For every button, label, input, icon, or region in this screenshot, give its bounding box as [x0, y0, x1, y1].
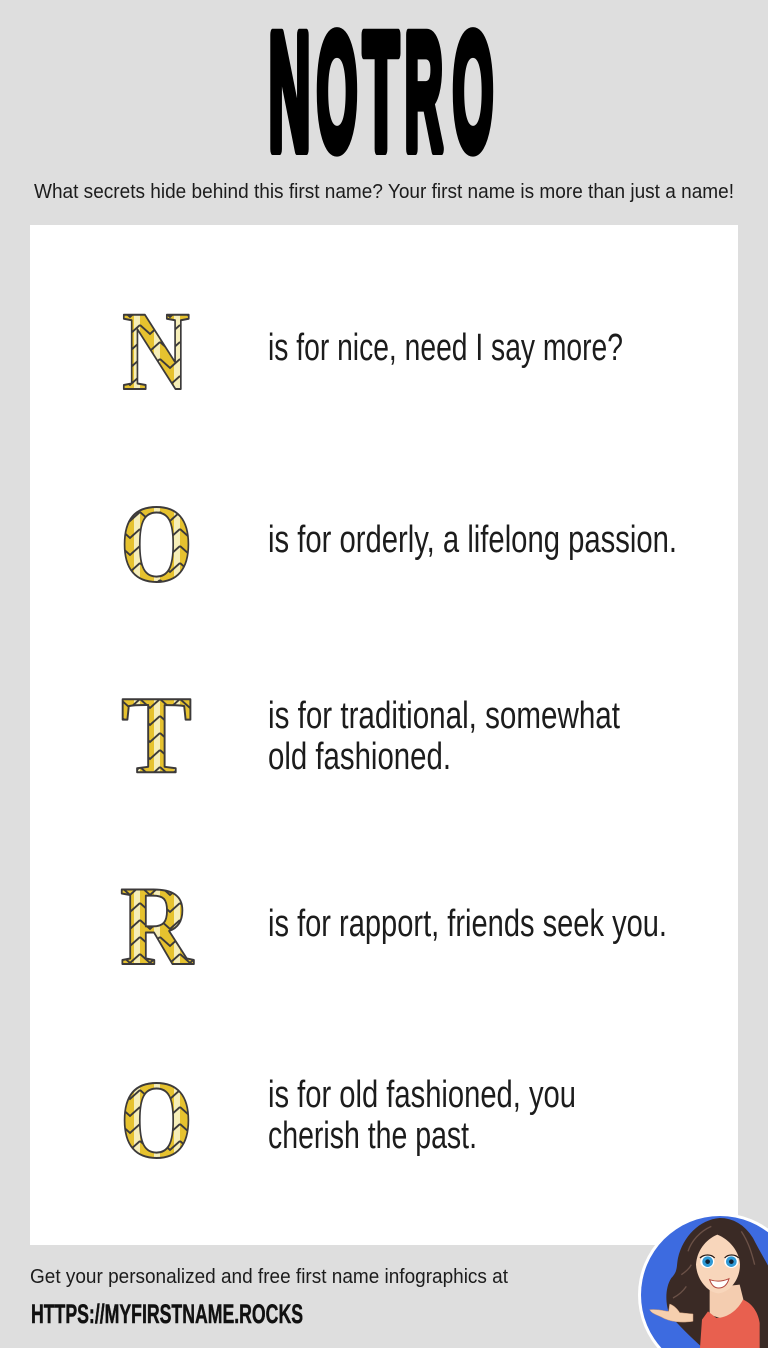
text: O lines — [268, 1074, 576, 1157]
icon: letter O: O — [120, 1059, 193, 1182]
text: O lines: is for old fashioned, you — [268, 1074, 576, 1116]
title: O — [316, 0, 358, 184]
row R — [120, 864, 667, 989]
footer text: Get your personalized and free first name infographics at — [30, 1266, 508, 1288]
shirt — [700, 1300, 760, 1348]
text: T lines — [268, 695, 620, 778]
row N — [122, 289, 623, 414]
hair — [666, 1218, 768, 1348]
title: O — [452, 0, 493, 184]
title: N — [268, 0, 311, 184]
avatar — [638, 1213, 768, 1348]
icon: letter N: N — [122, 289, 190, 414]
title: R — [404, 0, 443, 184]
footer url: HTTPS://MYFIRSTNAME.ROCKS — [31, 1299, 303, 1329]
icon: letter O: O — [120, 483, 193, 606]
row T — [121, 674, 620, 797]
hand — [650, 1304, 693, 1322]
subtitle: What secrets hide behind this first name? Your first name is more than just a name! — [34, 181, 734, 203]
eyes — [700, 1255, 714, 1268]
panel: letters card — [30, 225, 738, 1245]
icon: letter T: T — [121, 674, 192, 797]
mouth — [710, 1279, 729, 1288]
icon: letter R: R — [120, 864, 194, 989]
face — [696, 1235, 740, 1293]
text: T lines: is for traditional, somewhat — [268, 695, 620, 737]
text: N line: is for nice, need I say more? — [268, 327, 623, 369]
title: T — [363, 0, 399, 184]
row O2 — [120, 1059, 576, 1182]
row O — [120, 483, 677, 606]
text: O lines: cherish the past. — [268, 1115, 477, 1157]
neck — [710, 1285, 745, 1320]
title — [268, 0, 493, 184]
text: T lines: old fashioned. — [268, 736, 451, 778]
